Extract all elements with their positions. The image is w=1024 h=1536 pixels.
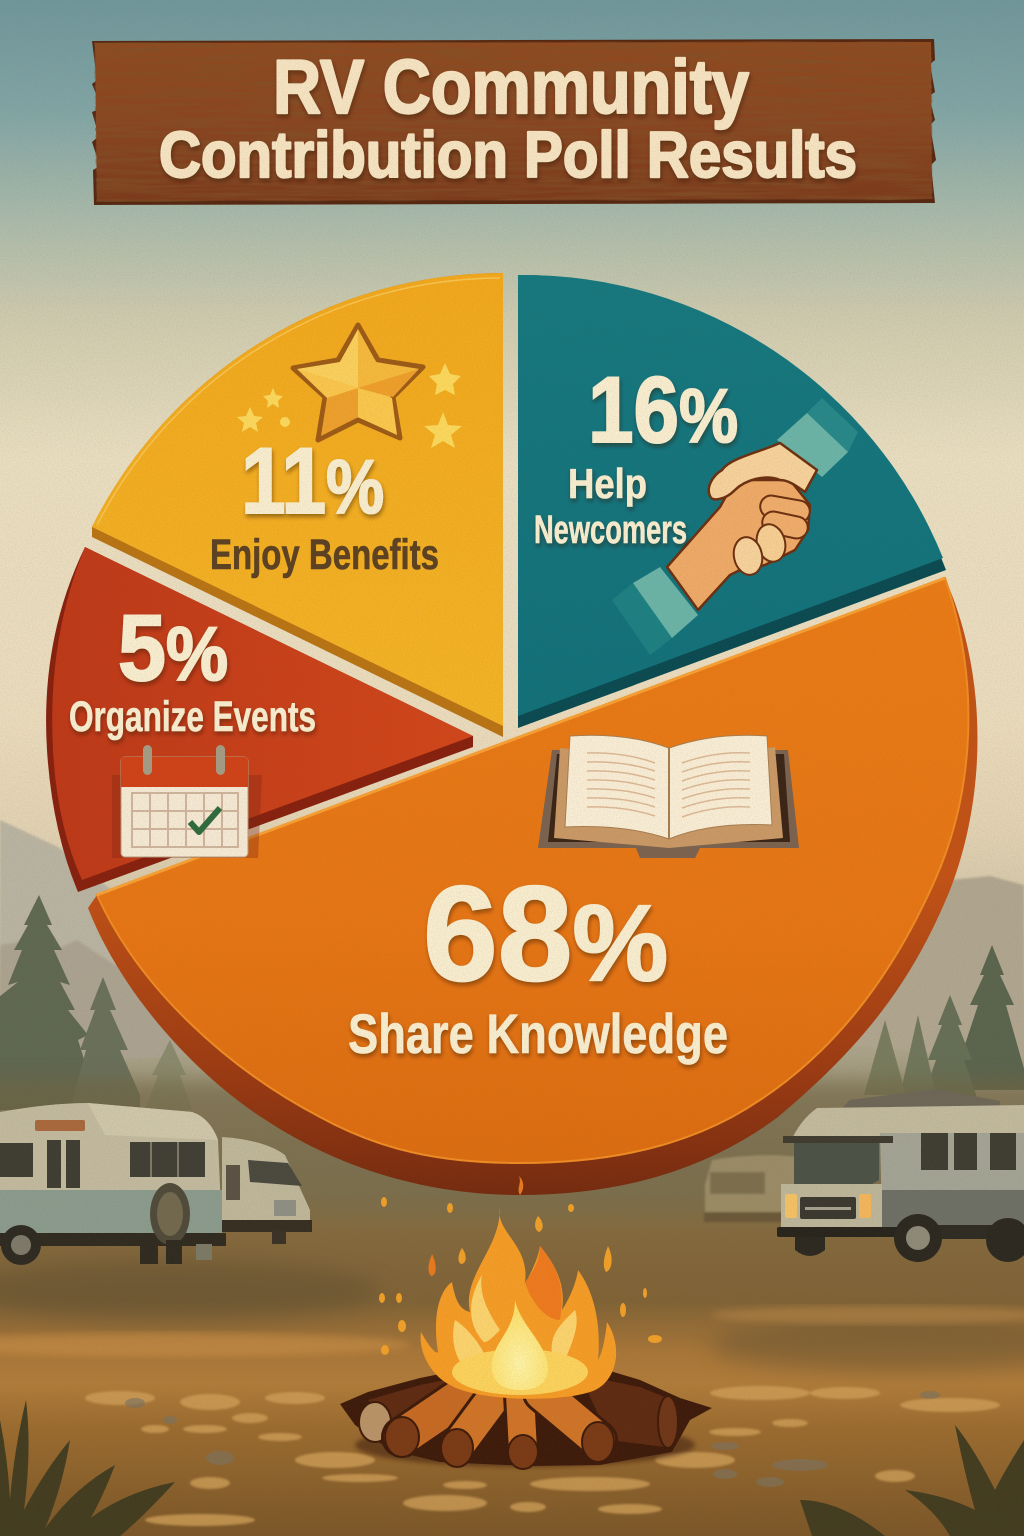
title sign — [90, 38, 940, 208]
slice: yellow enjoy benefits 11% — [92, 273, 503, 737]
label: Share Knowledge: Share Knowledge — [348, 1002, 728, 1065]
slice: teal help newcomers 16% — [518, 275, 946, 728]
label: Help: Help — [568, 460, 647, 507]
flames — [421, 1208, 616, 1399]
background: mountains — [0, 820, 1024, 1070]
title text line 1: RV Community — [273, 45, 749, 130]
icon: campfire — [340, 1176, 712, 1469]
background: far hazy RV right — [704, 1155, 800, 1222]
label: Organize Events: Organize Events — [69, 693, 316, 741]
icon: star — [237, 325, 462, 448]
background: pine trees left — [0, 895, 192, 1110]
background: main RV left — [0, 1103, 226, 1265]
label: Enjoy Benefits: Enjoy Benefits — [210, 531, 439, 579]
background: main RV right — [777, 1089, 1024, 1262]
title text line 2: Contribution Poll Results — [159, 118, 857, 191]
background: grass left corner — [0, 1400, 175, 1536]
value: 68%: 68% — [423, 858, 668, 1009]
background: pine trees right — [864, 945, 1024, 1100]
icon: calendar — [112, 745, 262, 858]
background: hazy band — [0, 1080, 1024, 1230]
pie chart — [46, 273, 978, 1195]
icon: handshake — [612, 398, 858, 655]
slice: orange share knowledge 68% — [88, 578, 978, 1195]
background: second RV left — [222, 1137, 312, 1244]
value: 11%: 11% — [241, 428, 384, 533]
value: 16%: 16% — [588, 357, 738, 462]
label: Newcomers: Newcomers — [534, 508, 687, 552]
icon: open book — [538, 735, 799, 858]
embers — [379, 1176, 662, 1355]
ground — [0, 1190, 1024, 1536]
background: grass right corner — [800, 1425, 1024, 1536]
logs — [340, 1368, 712, 1469]
slice: red organize events 5% — [46, 547, 473, 892]
value: 5%: 5% — [118, 595, 228, 700]
